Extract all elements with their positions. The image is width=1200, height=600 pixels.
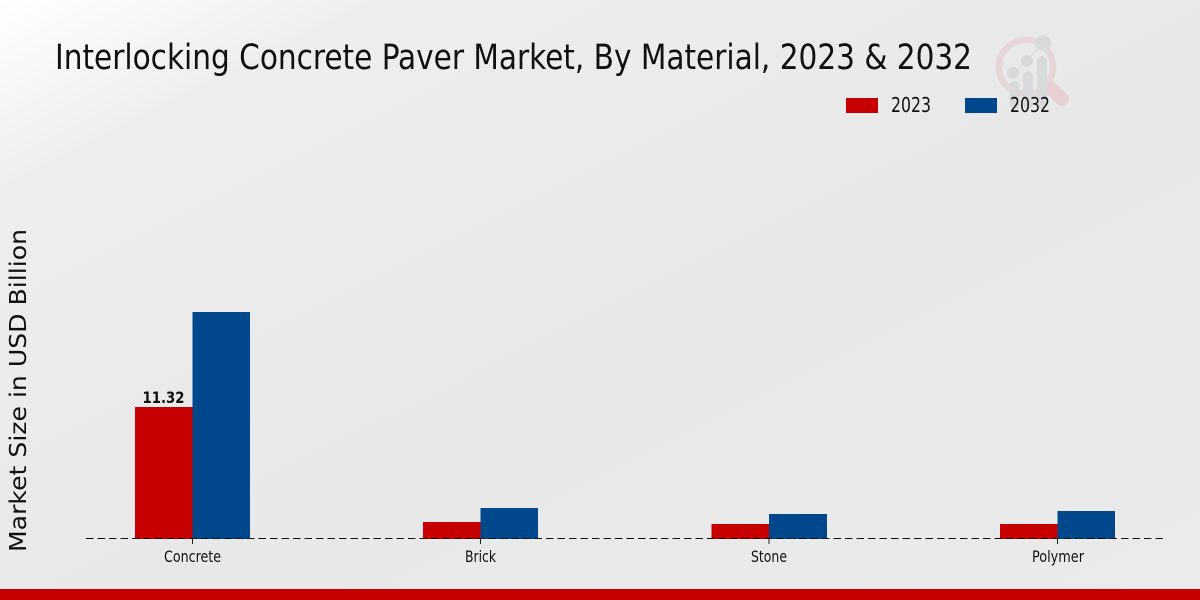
legend item: 2023: 2023	[891, 93, 931, 117]
category label: Brick: Brick	[465, 547, 497, 566]
legend	[846, 93, 1050, 117]
legend item: 2023	[846, 93, 931, 117]
bars: Stone	[712, 514, 827, 539]
data label: 11.32: 11.32	[142, 388, 184, 407]
icon: watermark magnifier with bars	[999, 35, 1062, 109]
title: Interlocking Concrete Paver Market, By Material, 2023 & 2032	[55, 38, 972, 78]
bars: Concrete	[135, 312, 250, 539]
bars: Brick	[423, 508, 538, 539]
bar chart	[86, 312, 1164, 566]
category label: Concrete: Concrete	[164, 547, 221, 566]
bars: Polymer	[1000, 511, 1115, 539]
axis baseline	[86, 538, 1164, 540]
category label: Stone: Stone	[751, 547, 787, 566]
legend item: 2032: 2032	[1010, 93, 1050, 117]
footer bar	[0, 589, 1200, 600]
category label: Polymer: Polymer	[1032, 547, 1084, 566]
y-axis label: Market Size in USD Billion	[6, 229, 32, 552]
legend item: 2032	[965, 93, 1050, 117]
